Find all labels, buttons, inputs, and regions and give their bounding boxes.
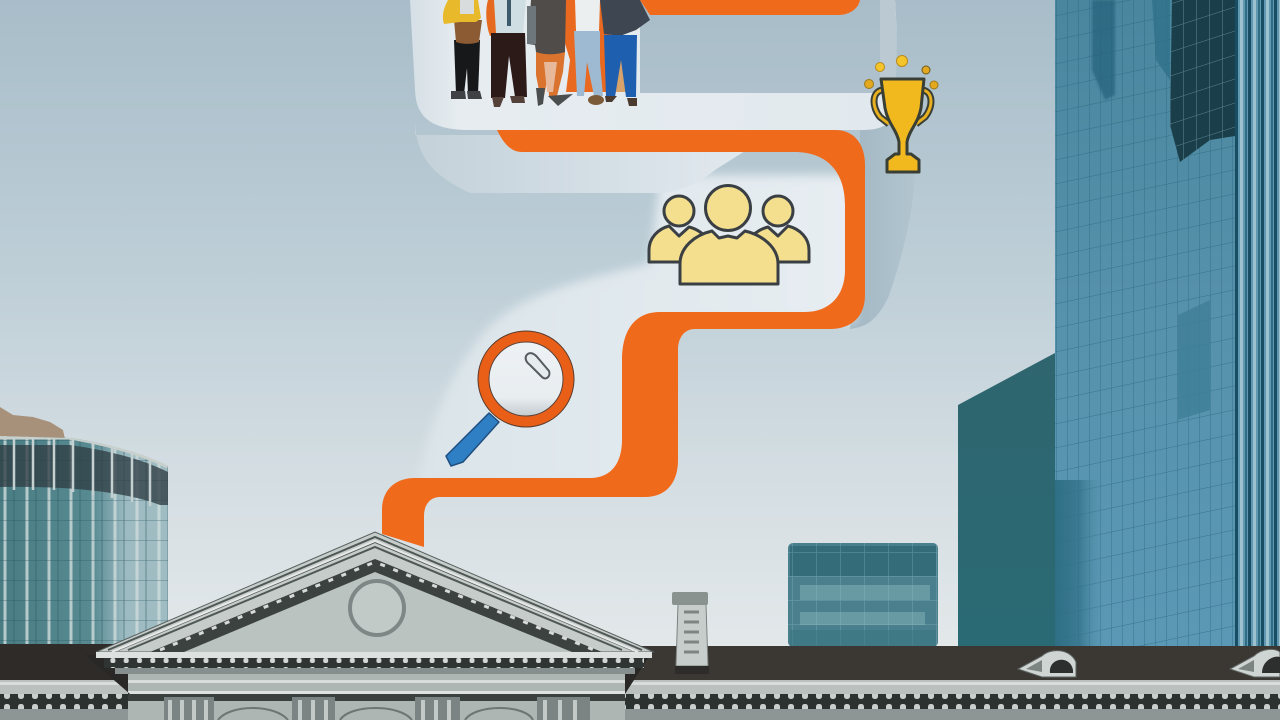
person: dark shirt and blue trousers: [600, 0, 650, 106]
building: portico with pediment: [85, 532, 654, 720]
building: classical roof and facade: [0, 644, 1280, 720]
person: patterned shirt and dark trousers: [486, 0, 527, 107]
entablature: [128, 672, 625, 720]
icon: gold trophy: [864, 56, 938, 172]
arrow path: upper orange ribbon: [640, 0, 860, 15]
icon: magnifying glass: [446, 331, 574, 466]
panel: right shadow of the path: [850, 0, 915, 329]
building: dark teal angled block: [958, 353, 1055, 646]
building: small glass block: [788, 543, 938, 647]
person: grey coat and orange skirt: [527, 0, 573, 106]
person: yellow jacket with brown bag: [443, 0, 482, 99]
person: orange jacket in the background: [562, 0, 610, 92]
building: tall blue glass tower: [1055, 0, 1280, 647]
arrow path: main orange ribbon: [382, 130, 865, 547]
arches and capitals: [164, 697, 590, 720]
icon: group of three people: [649, 186, 809, 284]
person: white top and light jeans: [574, 0, 604, 105]
icon: roof chimney: [672, 592, 709, 674]
people: diverse team standing on the step: [443, 0, 650, 107]
panel: upper step with grey recess: [410, 0, 897, 130]
icon: roof dormer: [1018, 651, 1076, 677]
panel: light road behind the path: [418, 175, 855, 485]
building: round glass tower on the left: [0, 407, 168, 646]
panel: lower ledge below the band: [415, 120, 770, 193]
icon: second roof dormer: [1230, 649, 1280, 677]
pediment: [96, 532, 654, 652]
